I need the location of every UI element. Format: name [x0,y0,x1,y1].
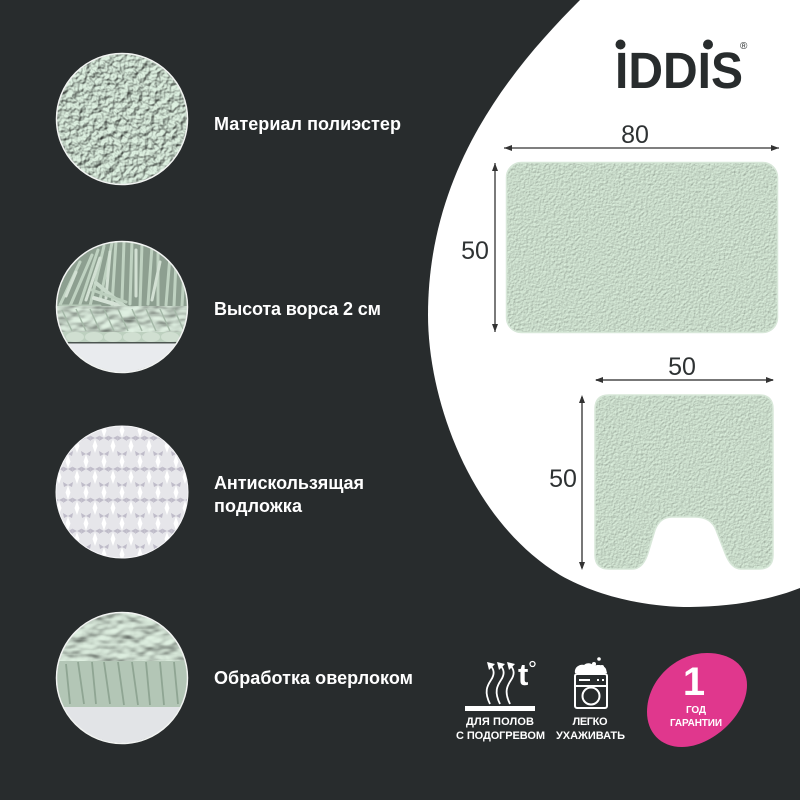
foam [575,663,607,673]
large rug [506,162,778,333]
caption: УХАЖИВАТЬ [556,730,625,742]
badge: warranty [647,653,747,747]
dimension: height 50 [549,395,585,570]
dimension: height 50: 50 [549,465,577,493]
machine body [575,674,607,708]
photo: overlock edge [55,610,189,745]
label: Антискользящая [214,473,364,493]
dimension: width 50 [595,353,774,383]
dimension: width 50: 50 [668,353,696,381]
small contour rug [595,395,773,569]
dimension: height 50 [461,163,498,332]
icon: heated floor [456,657,545,742]
feature: overlock edging [55,610,413,745]
dimension: width 80: 80 [621,121,649,149]
label: Высота ворса 2 см [214,299,381,319]
caption: ГАРАНТИИ [670,718,722,729]
photo outline [56,242,188,372]
caption: С ПОДОГРЕВОМ [456,730,545,742]
label: подложка [214,496,303,516]
dimension: width 80 [504,121,779,151]
logo: IDDIS [615,42,743,99]
caption [456,716,545,742]
controls [579,679,604,681]
bubbles [592,657,604,669]
pink blob [647,653,747,747]
logo: ® [740,41,748,52]
temperature mark: t [518,657,528,692]
heat arrows [487,666,514,704]
photo outline [56,612,188,744]
photo: pile close-up [56,54,188,184]
photo: backing pattern [56,426,188,558]
floor bar [465,706,535,711]
dimension: height 50: 50 [461,237,489,265]
feature: pile height [55,240,381,376]
label: Обработка оверлоком [214,668,413,688]
white blob panel [428,0,800,607]
photo: pile side view [55,240,189,376]
label: Материал полиэстер [214,114,401,134]
feature: anti-slip backing [56,426,364,558]
caption: ГОД [686,705,706,716]
arrow heads [487,662,515,670]
icon: washing machine [556,657,625,742]
caption [670,705,722,729]
feature: material [56,54,401,184]
caption [556,716,625,742]
caption: ДЛЯ ПОЛОВ [466,716,534,728]
label [214,473,364,516]
caption: ЛЕГКО [572,716,608,728]
number: 1 [683,660,705,704]
